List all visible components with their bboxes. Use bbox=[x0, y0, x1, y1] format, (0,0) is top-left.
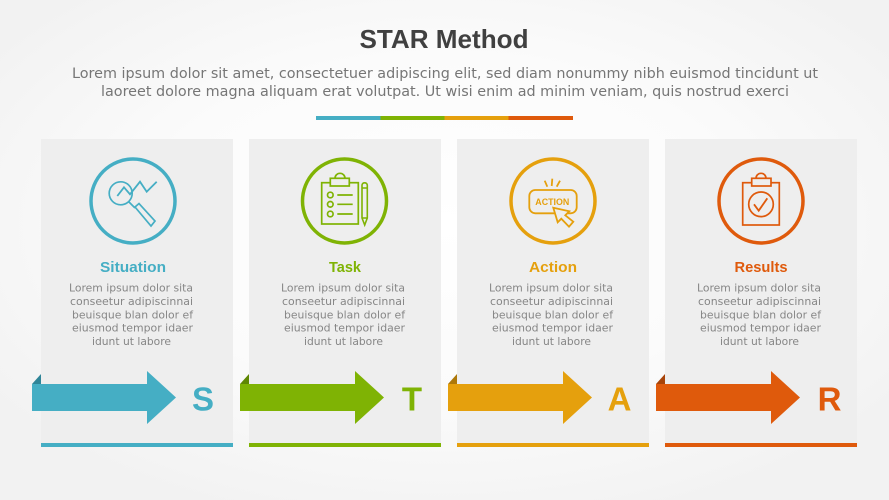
body text: conseetur adipiscinnai bbox=[490, 295, 613, 308]
arrow bbox=[240, 371, 384, 424]
body text bbox=[281, 282, 406, 348]
panel: action bbox=[448, 139, 649, 447]
card bottom bar bbox=[457, 443, 649, 447]
arrow bbox=[448, 371, 592, 424]
body text bbox=[69, 282, 194, 348]
body text: idunt ut labore bbox=[92, 335, 171, 348]
body text: conseetur adipiscinnai bbox=[698, 295, 821, 308]
heading: Action bbox=[529, 259, 577, 276]
icon: action button with cursor bbox=[511, 159, 595, 243]
letter R: R bbox=[818, 380, 842, 418]
body text: idunt ut labore bbox=[304, 335, 383, 348]
card background bbox=[665, 139, 857, 447]
heading: Situation bbox=[100, 259, 166, 276]
icon: magnifier over zigzag chart bbox=[91, 159, 175, 243]
four-colour divider bbox=[316, 116, 573, 120]
icon: clipboard with check bbox=[719, 159, 803, 243]
body text: eiusmod tempor idaer bbox=[72, 322, 194, 334]
heading: Results bbox=[734, 259, 788, 276]
intro paragraph: Lorem ipsum dolor sit amet, consectetuer adipiscing elit, sed diam nonummy nibh euismod tincidunt ut bbox=[72, 66, 818, 82]
arrow bbox=[32, 371, 176, 424]
body text: eiusmod tempor idaer bbox=[700, 322, 822, 334]
card bottom bar bbox=[41, 443, 233, 447]
body text: beuisque blan dolor ef bbox=[284, 308, 405, 322]
icon: action button with cursor: ACTION bbox=[535, 197, 569, 208]
icon: clipboard checklist and pencil bbox=[302, 159, 386, 243]
card background bbox=[41, 139, 233, 447]
panel: results bbox=[656, 139, 857, 447]
letter S: S bbox=[192, 380, 214, 418]
body text: conseetur adipiscinnai bbox=[70, 295, 193, 308]
body text bbox=[489, 282, 614, 348]
body text: idunt ut labore bbox=[720, 335, 799, 348]
intro paragraph: laoreet dolore magna aliquam erat volutpat. Ut wisi enim ad minim veniam, quis nostrud exerci bbox=[101, 84, 789, 100]
heading: Task bbox=[329, 259, 362, 276]
letter T: T bbox=[402, 380, 422, 418]
body text: Lorem ipsum dolor sita bbox=[281, 282, 405, 294]
card background bbox=[457, 139, 649, 447]
panel: situation bbox=[32, 139, 233, 447]
body text: Lorem ipsum dolor sita bbox=[69, 282, 193, 294]
card bottom bar bbox=[249, 443, 441, 447]
body text: eiusmod tempor idaer bbox=[284, 322, 406, 334]
body text: beuisque blan dolor ef bbox=[492, 308, 613, 322]
body text: Lorem ipsum dolor sita bbox=[489, 282, 613, 294]
intro paragraph bbox=[72, 66, 818, 100]
body text: beuisque blan dolor ef bbox=[72, 308, 193, 322]
body text: idunt ut labore bbox=[512, 335, 591, 348]
title: STAR Method bbox=[360, 24, 528, 54]
body text: Lorem ipsum dolor sita bbox=[697, 282, 821, 294]
body text: beuisque blan dolor ef bbox=[700, 308, 821, 322]
body text: conseetur adipiscinnai bbox=[282, 295, 405, 308]
body text bbox=[697, 282, 822, 348]
panel: task bbox=[240, 139, 441, 447]
arrow bbox=[656, 371, 800, 424]
card background bbox=[249, 139, 441, 447]
letter A: A bbox=[608, 380, 631, 418]
body text: eiusmod tempor idaer bbox=[492, 322, 614, 334]
card bottom bar bbox=[665, 443, 857, 447]
